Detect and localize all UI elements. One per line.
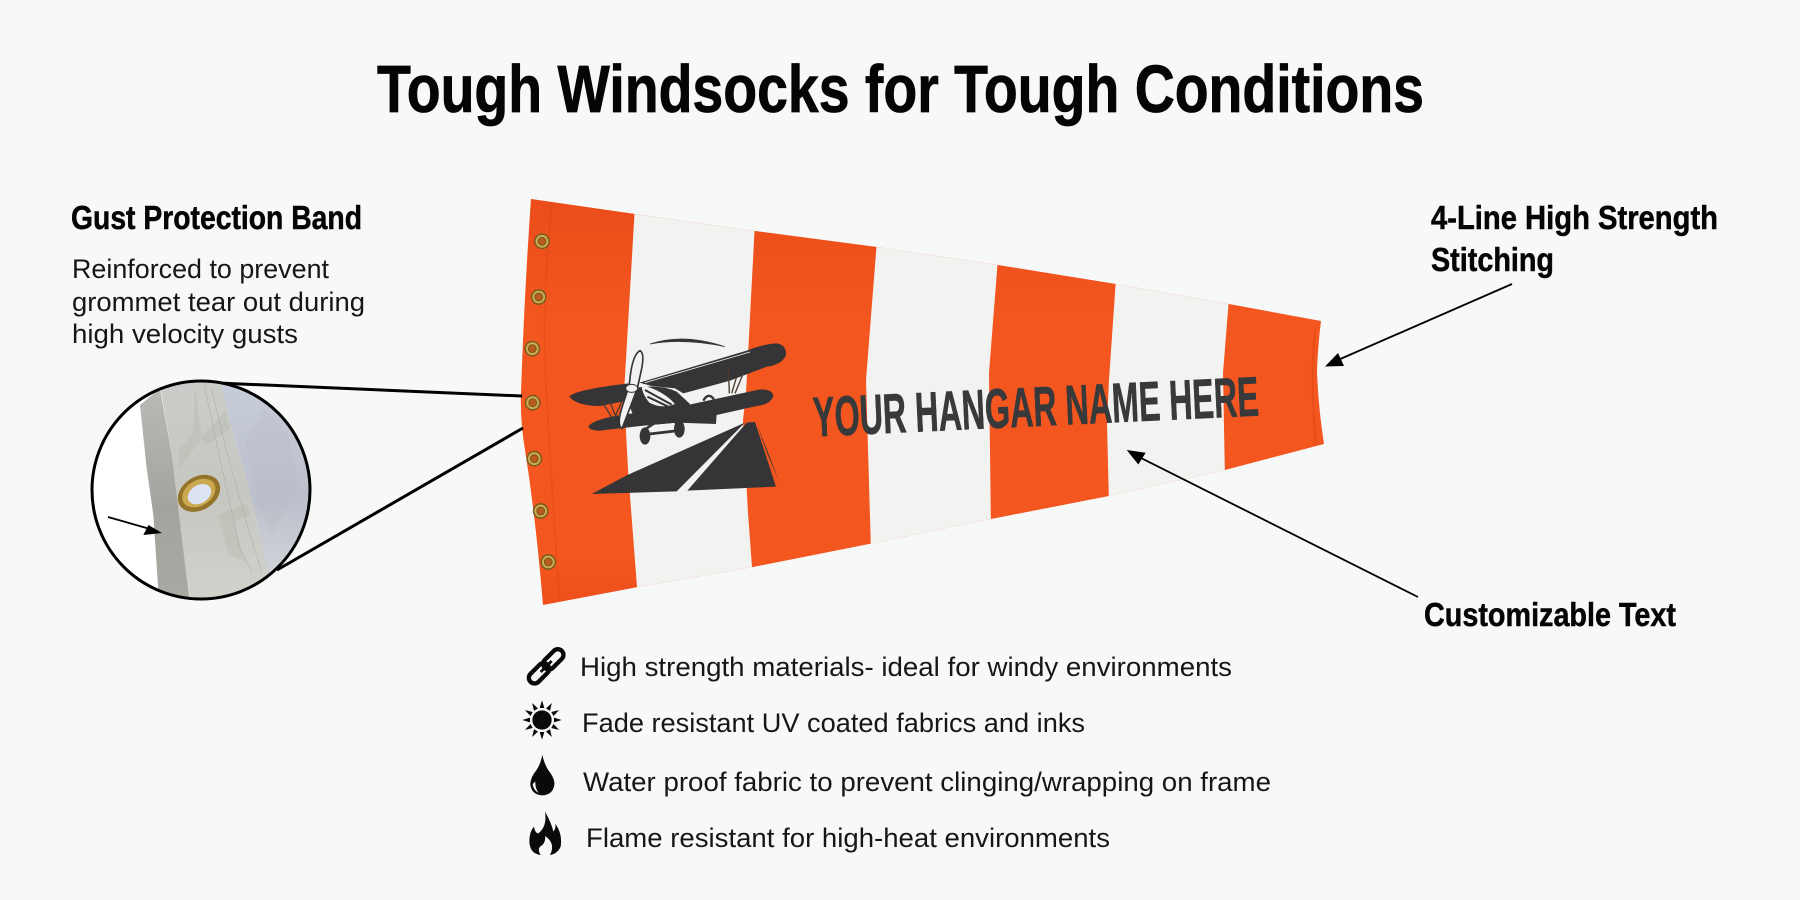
customizable text on sock: YOUR HANGAR NAME HERE [812, 365, 1260, 448]
fabric fold shadows [178, 385, 250, 562]
white stripe 1 [624, 205, 755, 600]
features list [522, 647, 1271, 855]
panel: 4-line stitching callout [1431, 199, 1718, 278]
windsock illustration [510, 190, 1340, 620]
fabric band [160, 378, 268, 605]
cowl highlight [642, 385, 675, 406]
description: gust protection band [72, 254, 365, 349]
icon: chain link [527, 647, 566, 686]
tail fin [703, 396, 714, 401]
cowl lines [645, 390, 672, 407]
propeller hub [626, 384, 638, 392]
icon: flame [529, 812, 561, 855]
icon: sun [522, 700, 562, 740]
stitching [204, 385, 262, 572]
arc above biplane [650, 339, 725, 347]
runway right [687, 422, 776, 491]
callout: customizable text: Customizable Text [1424, 596, 1676, 633]
icon: water drop [530, 755, 554, 795]
text: water proof: Water proof fabric to prevent clinging/wrapping on frame [583, 767, 1271, 797]
fabric shading [526, 199, 1024, 605]
description: gust protection band: high velocity gusts [72, 319, 298, 349]
folded hem [140, 388, 190, 605]
orange fabric base [510, 190, 1340, 620]
white stripe 3 [1107, 278, 1229, 505]
callout lines: lens to grommet [218, 383, 523, 570]
description: gust protection band: Reinforced to prevent [72, 254, 330, 284]
left lower wing and body [588, 407, 717, 431]
text: fade resistant: Fade resistant UV coated fabrics and inks [582, 708, 1085, 738]
runway sliver [757, 423, 779, 482]
runway edge highlight [628, 424, 737, 473]
panel: gust protection band text [71, 199, 365, 349]
icon: biplane and runway logo [569, 339, 786, 494]
lower right wing [677, 389, 773, 419]
propeller [619, 351, 643, 429]
text: flame resistant: Flame resistant for high-heat environments [586, 823, 1110, 853]
hem stitching [544, 202, 560, 600]
runway left [592, 423, 745, 494]
arrow: customizable text [1127, 450, 1418, 597]
brass grommet [178, 474, 220, 512]
panel: 4-line stitching callout: 4-Line High Strength [1431, 199, 1718, 236]
soft shadow on background [245, 408, 298, 535]
struts [600, 367, 743, 417]
fuselage [628, 386, 690, 426]
text: high strength: High strength materials- ideal for windy environments [580, 652, 1232, 682]
arrow: gust band [108, 517, 162, 535]
left upper wing [569, 383, 631, 406]
upper wing [639, 343, 786, 393]
blue-grey background [222, 384, 308, 574]
grommets [527, 236, 554, 568]
panel: 4-line stitching callout: Stitching [1431, 241, 1554, 278]
arrow: stitching [1325, 284, 1512, 366]
landing gear [640, 419, 685, 445]
heading: gust protection band: Gust Protection Band [71, 199, 362, 236]
upper wing highlight [645, 352, 750, 383]
title: Tough Windsocks for Tough Conditions [377, 52, 1424, 127]
description: gust protection band: grommet tear out during [72, 287, 365, 317]
white stripe 2 [866, 240, 998, 552]
detail lens: grommet close-up [92, 378, 318, 605]
